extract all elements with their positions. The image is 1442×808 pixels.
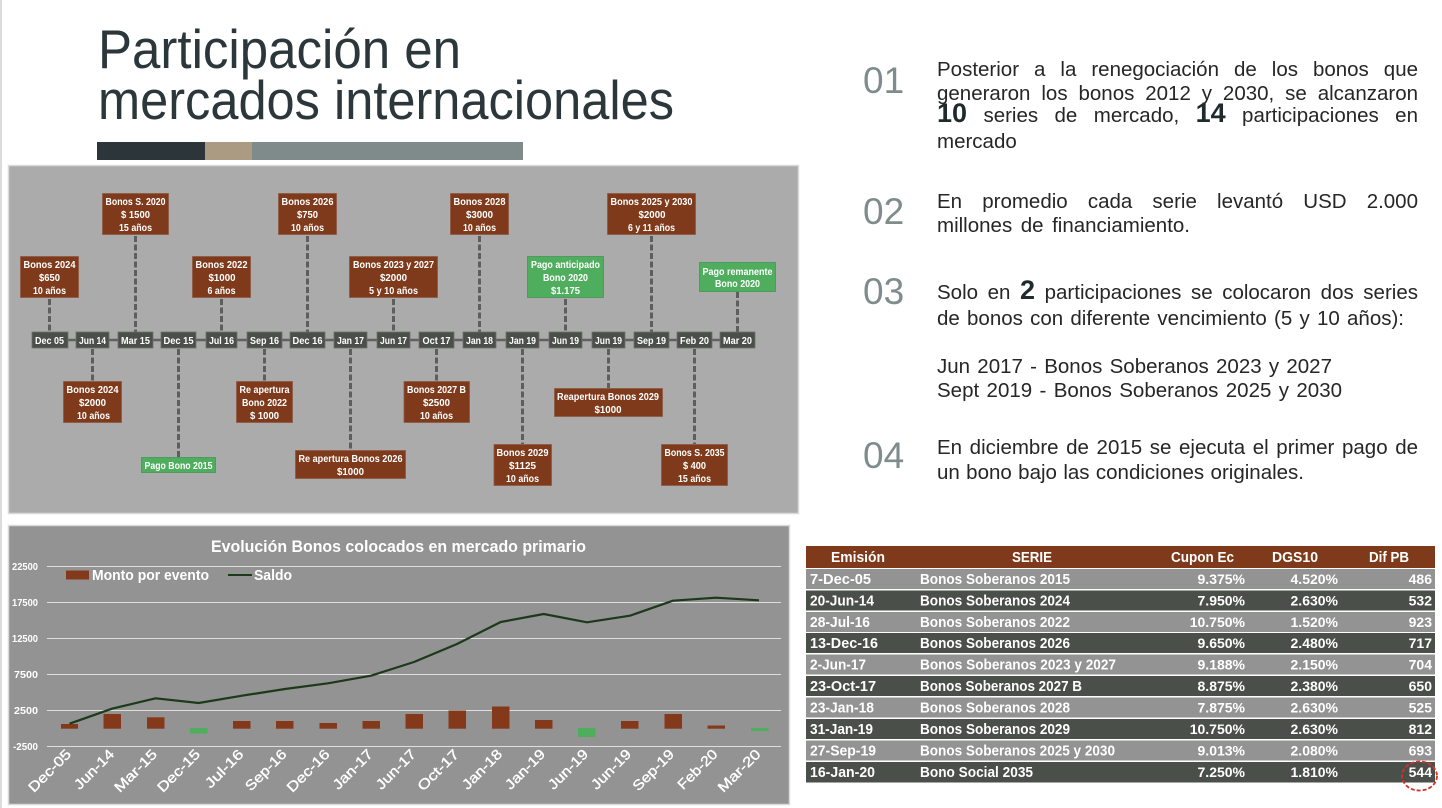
table rows: 28-Jul-16 [810,615,870,631]
event: Pago anticipado Bono 2020: $1.175 [551,285,580,297]
table rows: Bonos Soberanos 2022 [920,615,1070,631]
y axis labels: 12500 [12,634,38,645]
event: Pago remanente Bono 2020: Bono 2020 [715,278,760,290]
event: Bonos 2026 [278,194,336,332]
event: Pago remanente Bono 2020: Pago remanente [702,266,773,278]
x axis labels [25,746,764,795]
table rows: 10.750% [1190,614,1246,630]
table rows: Bonos Soberanos 2023 y 2027 [920,658,1116,674]
table rows [806,569,1435,782]
point 01 text [937,58,1418,153]
event: Bonos 2025 y 2030: Bonos 2025 y 2030 [610,196,693,208]
event: Bonos 2023 y 2027 [350,256,438,332]
point 04 text: un bono bajo las condiciones originales. [937,461,1304,484]
event: Bonos 2024 $2000: 10 años [77,410,110,422]
x axis labels: Oct-17 [414,746,462,794]
timeline date labels: Jun 14 [79,335,106,347]
event: Bonos 2029: 10 años [506,473,539,485]
point 02 text: millones de financiamiento. [937,214,1190,237]
event: Re apertura Bonos 2026: $1000 [337,466,364,478]
table rows: 7.950% [1198,592,1246,608]
timeline date labels: Oct 17 [422,335,451,347]
table rows: 2-Jun-17 [810,658,866,674]
event: Bonos 2028: 10 años [463,222,496,234]
table rows: Bonos Soberanos 2025 y 2030 [920,744,1115,760]
event: Bonos 2024 $2000: $2000 [79,397,106,409]
x axis labels: Mar-15 [111,746,160,795]
event: Bonos 2025 y 2030: 6 y 11 años [628,222,675,234]
point 03 number: 03 [863,271,904,312]
event: Bonos S. 2020: 15 años [119,222,152,234]
event: Bonos S. 2020: Bonos S. 2020 [106,196,166,208]
event: Bonos 2024 $650: Bonos 2024 [24,259,76,271]
bars: amount per event [61,706,768,737]
table rows: Bonos Soberanos 2028 [920,700,1070,716]
point 02 text [937,190,1418,237]
table rows: 532 [1409,592,1432,608]
table rows: Bono Social 2035 [920,765,1033,781]
table rows: 27-Sep-19 [810,744,876,760]
table rows: 4.520% [1291,571,1339,587]
event: Bonos 2026: $750 [297,209,318,221]
table rows: 9.650% [1198,635,1246,651]
timeline date labels: Jan 19 [509,335,536,347]
legend: Saldo [254,567,292,584]
table header: Emisión [831,550,885,566]
table rows: 2.080% [1291,742,1339,758]
point 03 text: Solo en 2 participaciones se colocaron dos series [937,275,1418,305]
event: Bonos 2027 B: $2500 [423,397,450,409]
event: Bonos S. 2035: $ 400 [683,460,706,472]
table rows: 544 [1409,764,1432,780]
point 03 text: de bonos con diferente vencimiento (5 y 10 años): [937,307,1404,330]
x axis labels: Feb-20 [674,746,721,792]
event: Re apertura Bono 2022: Re apertura [240,384,290,396]
event: Bonos 2023 y 2027: 5 y 10 años [369,285,418,297]
event: Pago anticipado Bono 2020 [528,256,604,332]
table header: DGS10 [1272,550,1318,566]
y axis labels: -2500 [13,742,38,753]
table rows: 2.630% [1291,700,1339,716]
timeline date labels: Dec 16 [292,335,323,347]
timeline date labels: Jun 17 [380,335,407,347]
event: Bonos 2023 y 2027: Bonos 2023 y 2027 [353,259,434,271]
event: Reapertura Bonos 2029: Reapertura Bonos 2029 [557,391,659,403]
event: Bonos 2026: Bonos 2026 [282,196,334,208]
point 04 text: En diciembre de 2015 se ejecuta el primer pago de [937,436,1418,459]
table header: Dif PB [1369,550,1409,566]
table rows: 2.630% [1291,721,1339,737]
event: Bonos 2027 B [404,349,470,422]
y axis labels [12,562,38,753]
x axis labels: Dec-16 [283,746,333,795]
event: Bonos S. 2020 [102,194,168,332]
x axis labels: Sep-16 [242,746,290,794]
timeline date labels: Dec 15 [164,335,194,347]
event: Re apertura Bono 2022: Bono 2022 [242,397,287,409]
point 01 text: generaron los bonos 2012 y 2030, se alcanzaron [937,82,1418,105]
timeline date labels: Dec 05 [35,335,64,347]
event: Reapertura Bonos 2029 [554,349,662,416]
event: Pago Bono 2015: Pago Bono 2015 [144,460,213,472]
panel: chart of bonds placed in primary market [8,524,790,806]
event: Bonos 2022: $1000 [208,272,236,284]
y axis labels: 22500 [12,562,38,573]
table: bond issues [806,546,1438,792]
timeline date labels: Jun 19 [595,335,622,347]
table rows: 8.875% [1198,678,1246,694]
event: Bonos 2025 y 2030 [608,194,696,332]
point 01 number: 01 [863,60,904,101]
event: Bonos 2024 $650: $650 [39,272,60,284]
x axis labels: Jun-19 [544,746,591,792]
event: Bonos 2024 $2000: Bonos 2024 [66,384,119,396]
event: Bonos 2026: 10 años [291,222,324,234]
line: balance [70,598,759,724]
timeline date labels: Jul 16 [209,335,234,347]
table rows: 31-Jan-19 [810,722,873,738]
table header: Cupon Ec [1171,550,1234,566]
event: Bonos 2022: 6 años [208,285,236,297]
event: Bonos 2029: $1125 [509,460,536,472]
timeline date labels: Mar 20 [723,335,752,347]
x axis labels: Jul-16 [201,746,247,791]
x axis labels: Jan-18 [458,746,505,792]
event: Bonos 2029: Bonos 2029 [496,447,549,459]
table rows: 20-Jun-14 [810,594,874,610]
point 03 text [937,275,1418,402]
table rows: Bonos Soberanos 2015 [920,572,1070,588]
point 02 number: 02 [863,191,904,232]
event: Bonos S. 2035: Bonos S. 2035 [664,447,725,459]
event: Bonos 2022: Bonos 2022 [196,259,248,271]
point 02 text: En promedio cada serie levantó USD 2.000 [937,190,1418,213]
table rows: 525 [1409,700,1432,716]
event: Bonos 2024 $650: 10 años [33,285,66,297]
x axis labels: Sep-19 [629,746,677,794]
timeline date labels [32,332,755,348]
event: Bonos S. 2020: $ 1500 [121,209,150,221]
title: mercados internacionales [98,69,674,131]
event: Re apertura Bono 2022: $ 1000 [250,410,279,422]
table rows: 693 [1409,742,1432,758]
event: Bonos 2027 B: Bonos 2027 B [407,384,466,396]
event: Pago Bono 2015 [142,349,216,472]
table rows: 9.188% [1198,656,1246,672]
event: Bonos 2027 B: 10 años [420,410,453,422]
callout: red dashed circle around 544 [1402,762,1437,790]
timeline date labels: Feb 20 [680,335,709,347]
timeline date labels: Jan 18 [466,335,493,347]
event: Pago anticipado Bono 2020: Pago anticipado [531,259,600,271]
x axis labels: Jun-19 [587,746,634,792]
timeline date labels: Mar 15 [121,335,150,347]
table rows: Bonos Soberanos 2024 [920,594,1070,610]
event: Bonos 2024 $650 [20,256,78,332]
x axis labels: Dec-05 [25,746,74,795]
point 03 text: Jun 2017 - Bonos Soberanos 2023 y 2027 [937,355,1332,378]
table rows: 7.875% [1198,700,1246,716]
table rows: 23-Jan-18 [810,700,874,716]
table rows: Bonos Soberanos 2026 [920,636,1070,652]
event: Pago remanente Bono 2020 [700,262,776,332]
event: Re apertura Bonos 2026: Re apertura Bonos 2026 [298,453,403,465]
point 01 text: 10 series de mercado, 14 participaciones en [937,98,1418,128]
timeline date labels: Sep 16 [250,335,279,347]
table header [806,546,1435,568]
table rows: 1.520% [1291,614,1339,630]
table rows: 9.375% [1198,571,1246,587]
x axis labels: Jun-17 [372,746,419,792]
event: Bonos 2024 $2000 [64,349,122,422]
x axis labels: Mar-20 [714,746,764,795]
legend: Monto por evento [92,567,209,584]
table rows: 923 [1409,614,1432,630]
event: Bonos 2025 y 2030: $2000 [638,209,666,221]
event: Bonos 2023 y 2027: $2000 [380,272,407,284]
table rows: 9.013% [1198,742,1246,758]
event: Bonos 2028: Bonos 2028 [454,196,506,208]
event: Bonos 2029 [494,349,552,486]
table rows: 812 [1409,721,1432,737]
table rows: 2.630% [1291,592,1339,608]
table rows: 2.480% [1291,635,1339,651]
title [98,18,674,131]
accent bar [97,142,523,160]
table rows: 704 [1409,656,1432,672]
point 01 text: Posterior a la renegociación de los bonos que [937,58,1418,81]
table rows: 717 [1409,635,1432,651]
point 04 text [937,436,1418,484]
point 03 text: Sept 2019 - Bonos Soberanos 2025 y 2030 [937,379,1342,402]
event: Bonos 2028: $3000 [466,209,493,221]
table rows: 2.380% [1291,678,1339,694]
legend [66,567,292,584]
y axis labels: 2500 [14,706,38,717]
event: Re apertura Bono 2022 [236,349,292,422]
panel: timeline of bond events [8,164,800,514]
event: Pago anticipado Bono 2020: Bono 2020 [543,272,588,284]
table rows: Bonos Soberanos 2027 B [920,679,1082,695]
chart title: Evolución Bonos colocados en mercado primario [211,537,586,556]
table rows: 650 [1409,678,1432,694]
table rows: 7.250% [1198,764,1246,780]
point 01 text: mercado [937,130,1017,153]
timeline date labels: Jun 19 [552,335,579,347]
y axis labels: 7500 [14,670,38,681]
event: Bonos 2022 [192,256,250,332]
table rows: 1.810% [1291,764,1339,780]
event: Re apertura Bonos 2026 [296,349,406,478]
x axis labels: Dec-15 [154,746,203,795]
timeline date labels: Sep 19 [637,335,666,347]
event: Bonos 2028 [450,194,508,332]
x axis labels: Jun-14 [70,746,117,792]
title: Participación en [98,18,461,80]
event: Reapertura Bonos 2029: $1000 [594,404,622,416]
table rows: 2.150% [1291,656,1339,672]
table rows: Bonos Soberanos 2029 [920,722,1070,738]
event: Bonos S. 2035: 15 años [678,473,711,485]
table rows: 13-Dec-16 [810,636,878,652]
table rows: 10.750% [1190,721,1246,737]
x axis labels: Jan-19 [501,746,548,792]
point 04 number: 04 [863,435,904,476]
table rows: 16-Jan-20 [810,765,875,781]
table rows: 486 [1409,571,1432,587]
event: Bonos S. 2035 [662,349,728,486]
x axis labels: Jan-17 [329,746,376,792]
table rows: 7-Dec-05 [810,572,871,588]
timeline date labels: Jan 17 [337,335,364,347]
table header: SERIE [1012,550,1052,566]
y axis labels: 17500 [12,598,38,609]
table rows: 23-Oct-17 [810,679,876,695]
